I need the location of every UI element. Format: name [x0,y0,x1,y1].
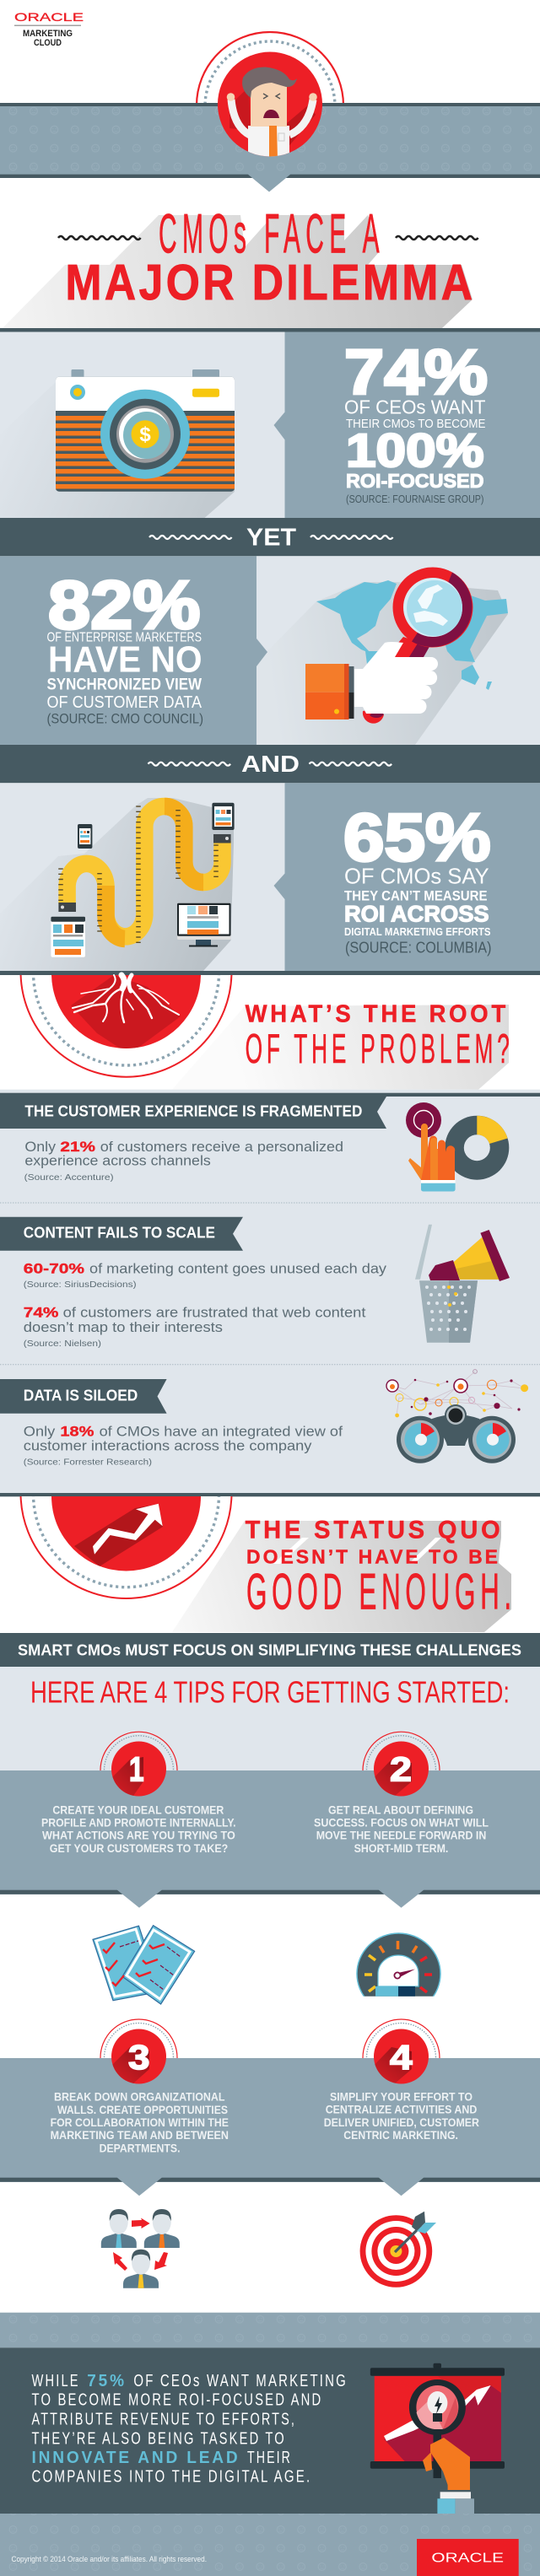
tip 4 text [324,2090,479,2142]
tip 1 text: CREATE YOUR IDEAL CUSTOMER [52,1803,224,1817]
logo: Oracle Marketing Cloud: ORACLE [14,10,84,24]
rings for tips 3 and 4 [100,2019,440,2096]
header patterned band [0,103,540,192]
icon: world map [316,580,508,690]
tip 3 text [51,2090,229,2154]
closing text: THEY’RE ALSO BEING TASKED TO [32,2429,286,2448]
74% stat text: 100% [346,423,484,477]
tip 1 text: WHAT ACTIONS ARE YOU TRYING TO [42,1829,235,1842]
tip 3 text: WALLS. CREATE OPPORTUNITIES [57,2103,228,2116]
text: 21% stat: Only [24,1139,57,1155]
74% stat text: OF CEOs WANT [344,396,486,418]
band: YET [0,518,540,556]
text: 74% stat [24,1305,366,1349]
tip 2 text [314,1803,489,1855]
text: 18% stat: of CMOs have an integrated view of [100,1423,343,1439]
heading: what's the root of the problem [246,1001,514,1072]
icon: magnifying glass [378,567,472,675]
tip 4 number: 4 [390,2038,413,2077]
logo: Oracle Marketing Cloud: CLOUD [34,38,62,48]
tip 4 text: DELIVER UNIFIED, CUSTOMER [324,2115,479,2129]
panel: tips heading [0,1667,540,1770]
65% stat text: OF CMOs SAY [344,865,489,889]
footer Oracle logo: ORACLE [431,2552,504,2566]
closing text [32,2372,348,2487]
65% stat text: THEY CAN’T MEASURE [344,888,488,903]
74% stat text: THEIR CMOs TO BECOME [346,418,486,431]
text: 18% stat: customer interactions across the company [24,1437,312,1453]
icon: tablet [212,803,235,830]
logo: Oracle Marketing Cloud [14,10,84,48]
closing text: THEIR [247,2449,292,2467]
text: 74% stat: 74% [24,1305,58,1321]
tip 3 number [105,2029,166,2083]
icon: desktop monitor [177,903,231,946]
icon: hand holding magnifier [305,642,438,724]
section: status quo header [0,1493,540,1632]
title: MAJOR DILEMMA [66,254,476,310]
panel: 74% CEOs stat [0,328,540,518]
title [58,202,478,310]
65% stat text: ROI ACROSS [344,902,489,927]
74% stat text: ROI-FOCUSED [346,470,484,492]
panel: 65% CMOs stat [0,783,540,971]
rings for tips 1 and 2 [100,1732,440,1808]
text: 60-70% stat [24,1260,387,1290]
banner: customer experience fragmented: THE CUSTOMER EXPERIENCE IS FRAGMENTED [24,1102,362,1119]
footer Oracle logo [417,2539,519,2576]
text: 18% stat: (Source: Forrester Research) [24,1457,152,1467]
icon: camera with dollar lens: $ [139,423,151,446]
tip 4 text: SIMPLIFY YOUR EFFORT TO [330,2090,472,2104]
band: AND [0,745,540,783]
tip 3 text: BREAK DOWN ORGANIZATIONAL [54,2090,225,2104]
82% stat text [47,568,203,726]
text: 21% stat: of customers receive a personalized [100,1139,343,1155]
band: tips 1 and 2 [0,1741,540,1908]
text: 60-70% stat: 60-70% [24,1260,84,1276]
text: 60-70% stat: of marketing content goes unused each day [89,1260,387,1276]
panel: problems list [0,1090,540,1493]
panel: 82% marketers stat [0,556,540,745]
74% stat text: (SOURCE: FOURNAISE GROUP) [346,493,484,505]
banner: smart CMOs: SMART CMOs MUST FOCUS ON SIMPLIFYING THESE CHALLENGES [18,1641,521,1658]
icon: people network [386,1370,528,1417]
text: 18% stat [24,1423,343,1467]
banner: customer experience fragmented [0,1097,386,1129]
tip 2 number [368,1741,429,1797]
text: 21% stat: experience across channels [24,1153,211,1169]
tip 2 number: 2 [390,1750,412,1789]
band: AND: AND [241,751,300,777]
icon: collaborating people [101,2209,180,2288]
band: tips 3 and 4 [0,2029,540,2196]
closing text: TO BECOME MORE ROI-FOCUSED AND [32,2391,322,2410]
text: 74% stat: doesn’t map to their interests [24,1319,223,1335]
icon: hand and donut chart [406,1102,509,1191]
title shadow [3,215,472,328]
82% stat text: HAVE NO [48,640,202,681]
tip 3 number: 3 [128,2038,150,2077]
tip 3 text: MARKETING TEAM AND BETWEEN [51,2128,229,2142]
text: 21% stat: 21% [60,1139,95,1155]
tip 2 text: SUCCESS. FOCUS ON WHAT WILL [314,1815,489,1829]
icon: presentation with magnifier and lightbulb [370,2363,505,2514]
heading: status quo: DOESN’T HAVE TO BE [246,1545,500,1567]
header ring behind character [197,32,343,179]
section: root of the problem header [0,971,540,1090]
icon: megaphone in trash can [415,1225,510,1343]
banner: data is siloed [0,1379,167,1414]
text: 74% stat: of customers are frustrated that web content [63,1305,366,1321]
tip 3 text: DEPARTMENTS. [100,2141,181,2154]
tip 1 text [41,1803,236,1855]
text: 21% stat [24,1139,343,1183]
text: 74% stat: (Source: Nielsen) [24,1339,101,1349]
icon: target with arrow [360,2212,436,2288]
icon: frustrated CMO character [218,52,322,159]
82% stat text: SYNCHRONIZED VIEW [47,675,202,693]
65% stat text [343,800,491,956]
tip 3 text: FOR COLLABORATION WITHIN THE [51,2115,229,2129]
tip 2 text: GET REAL ABOUT DEFINING [328,1803,473,1817]
tip 4 number [368,2029,429,2083]
82% stat text: OF CUSTOMER DATA [47,693,202,712]
text: 18% stat: Only [24,1423,56,1439]
tip 4 text: CENTRALIZE ACTIVITIES AND [326,2102,477,2115]
banner: data is siloed: DATA IS SILOED [24,1387,138,1404]
82% stat text: 82% [48,568,201,644]
icon: ring with trend arrow [20,1496,233,1599]
panel: closing statement [0,2313,540,2576]
icon: camera with dollar lens [56,369,235,492]
tip 1 number: 1 [129,1750,144,1789]
banner: smart CMOs [0,1633,540,1667]
footer copyright: Copyright © 2014 Oracle and/or its affiliates. All rights reserved. [12,2555,207,2564]
tip 4 text: CENTRIC MARKETING. [343,2128,458,2142]
tip 2 text: MOVE THE NEEDLE FORWARD IN [316,1829,486,1842]
icon: phone [78,824,92,849]
closing text: COMPANIES INTO THE DIGITAL AGE. [32,2468,311,2487]
heading: status quo [246,1516,516,1620]
banner: content fails to scale: CONTENT FAILS TO SCALE [24,1223,215,1241]
closing text: ATTRIBUTE REVENUE TO EFFORTS, [32,2410,296,2428]
closing text: INNOVATE AND LEAD [32,2449,240,2467]
74% stat text: 74% [344,337,488,407]
heading: what's the root of the problem: WHAT’S THE ROOT [246,1001,509,1028]
icon: web page [51,917,85,957]
82% stat text: OF ENTERPRISE MARKETERS [47,631,202,645]
tip 1 number [105,1741,166,1797]
tip 1 text: PROFILE AND PROMOTE INTERNALLY. [41,1815,236,1829]
banner: content fails to scale [0,1217,243,1251]
65% stat text: DIGITAL MARKETING EFFORTS [344,925,491,938]
icon: measuring tape [58,806,231,943]
tip 1 text: GET YOUR CUSTOMERS TO TAKE? [50,1841,228,1855]
65% stat text: 65% [343,800,491,875]
closing text: OF CEOs WANT MARKETING [133,2372,348,2390]
text: 18% stat: 18% [60,1423,94,1439]
band: YET: YET [246,525,296,552]
closing text: WHILE [32,2372,80,2390]
icon: binoculars [397,1404,516,1463]
closing text: 75% [87,2372,127,2390]
text: 60-70% stat: (Source: SiriusDecisions) [24,1280,137,1290]
icon: ring with roots [20,972,233,1078]
tip 2 text: SHORT-MID TERM. [354,1841,448,1855]
text: 21% stat: (Source: Accenture) [24,1172,114,1183]
74% stat text [344,337,488,505]
logo: Oracle Marketing Cloud: MARKETING [23,29,73,39]
82% stat text: (SOURCE: CMO COUNCIL) [47,710,203,726]
heading: status quo: THE STATUS QUO [246,1516,504,1544]
icon: checklists [93,1926,195,2004]
icon: speedometer gauge [356,1932,441,1997]
65% stat text: (SOURCE: COLUMBIA) [345,939,491,956]
